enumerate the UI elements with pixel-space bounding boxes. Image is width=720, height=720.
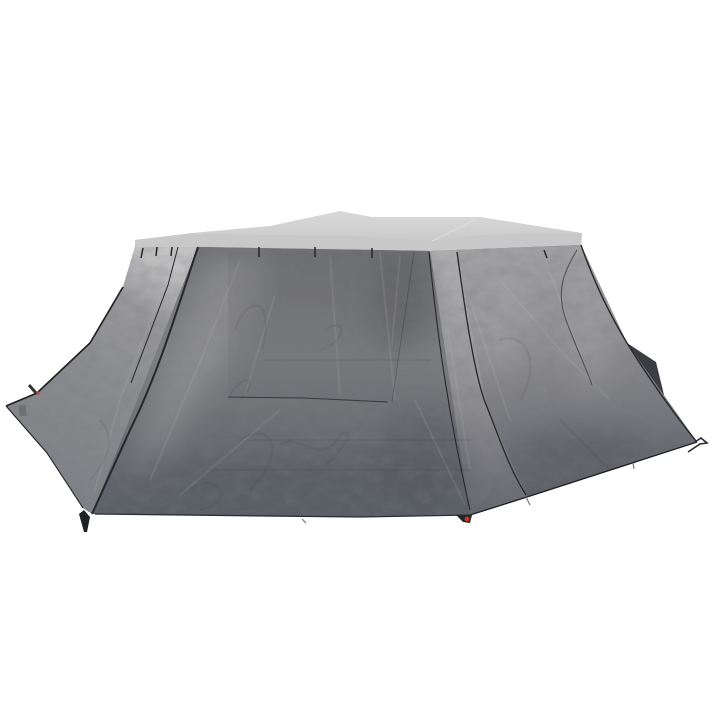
corner label tag [18, 405, 27, 416]
back flap at right [627, 343, 664, 403]
panel: right side wall [456, 245, 697, 497]
wall base [6, 245, 697, 517]
right corner peg [688, 438, 707, 452]
dark fold lines [90, 305, 571, 480]
bottom left peg [79, 510, 90, 532]
outer hem edges [6, 287, 697, 517]
soft shading [90, 247, 630, 506]
bottom centre red peg [456, 515, 472, 523]
tent illustration [6, 211, 709, 532]
panel: left side wall [6, 247, 198, 514]
window flap edge shading [228, 252, 414, 402]
fabric texture [130, 247, 578, 514]
small stake loops [302, 463, 634, 523]
fabric crease lines [95, 252, 610, 505]
panel: right corner wall [430, 250, 527, 515]
roof canopy [135, 211, 582, 253]
panel: front wall [92, 247, 470, 517]
seams and zips [92, 245, 696, 514]
left guy loop with red tip [29, 385, 40, 395]
